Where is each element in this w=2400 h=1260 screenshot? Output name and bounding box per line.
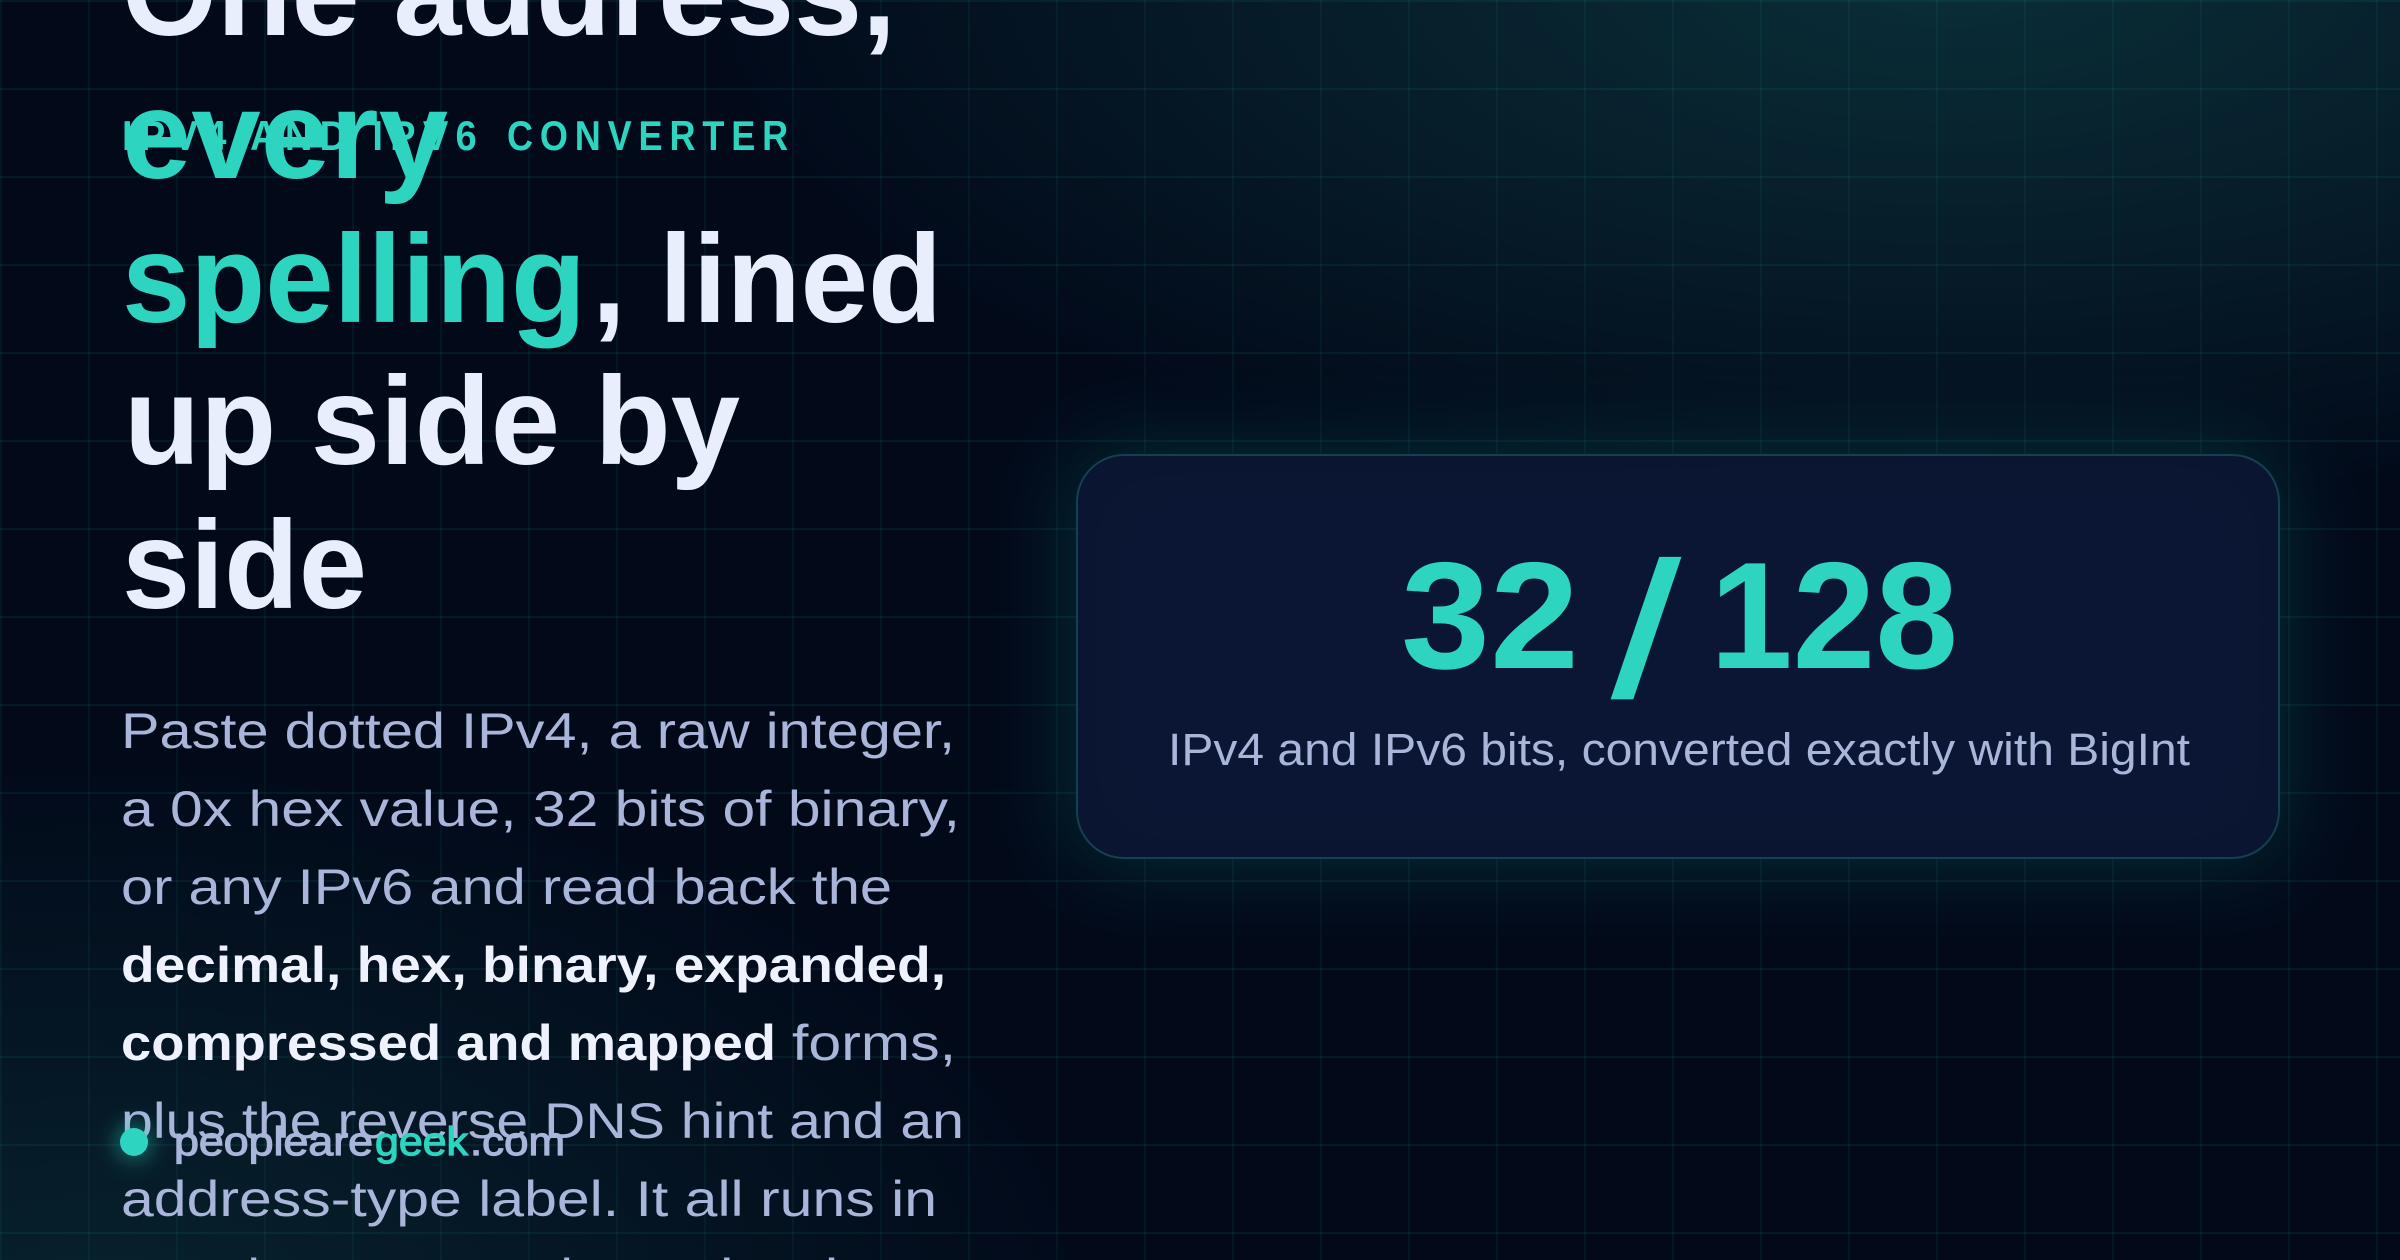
big number: 32 / 128	[1401, 525, 1958, 737]
stat card	[1077, 455, 2279, 858]
card caption: IPv4 and IPv6 bits, converted exactly with BigInt	[1168, 724, 2191, 775]
heading: spelling	[122, 210, 586, 349]
heading: up side by	[124, 352, 740, 491]
description paragraph: forms,	[792, 1015, 956, 1071]
eyebrow label: IPV4 AND IPV6	[122, 112, 484, 159]
brand name: geek	[375, 1120, 469, 1164]
description paragraph: plus the reverse DNS hint and an	[121, 1093, 964, 1149]
icon: status dot	[118, 1126, 150, 1158]
eyebrow label: CONVERTER	[507, 112, 795, 159]
brand name: .com	[470, 1120, 565, 1164]
brand name: peopleare	[174, 1120, 373, 1164]
card glow	[1076, 454, 2280, 859]
description paragraph: Paste dotted IPv4, a raw integer,	[121, 703, 955, 759]
big number: 32 / 128: 128	[1710, 531, 1958, 701]
brand name	[174, 1120, 565, 1164]
big number: 32 / 128: /	[1613, 525, 1679, 737]
description paragraph: a 0x hex value, 32 bits of binary,	[121, 781, 960, 837]
footer brand	[118, 1120, 565, 1164]
heading: , lined	[592, 210, 942, 349]
description paragraph: compressed and mapped	[121, 1015, 776, 1071]
description paragraph: decimal, hex, binary, expanded,	[121, 937, 946, 993]
heading	[122, 0, 942, 635]
heading: every	[122, 66, 448, 205]
description paragraph: address-type label. It all runs in	[121, 1171, 937, 1227]
description paragraph: or any IPv6 and read back the	[121, 859, 892, 915]
description paragraph	[121, 703, 964, 1260]
eyebrow label	[122, 112, 795, 159]
big number: 32 / 128: 32	[1401, 531, 1579, 701]
heading: side	[122, 496, 367, 635]
